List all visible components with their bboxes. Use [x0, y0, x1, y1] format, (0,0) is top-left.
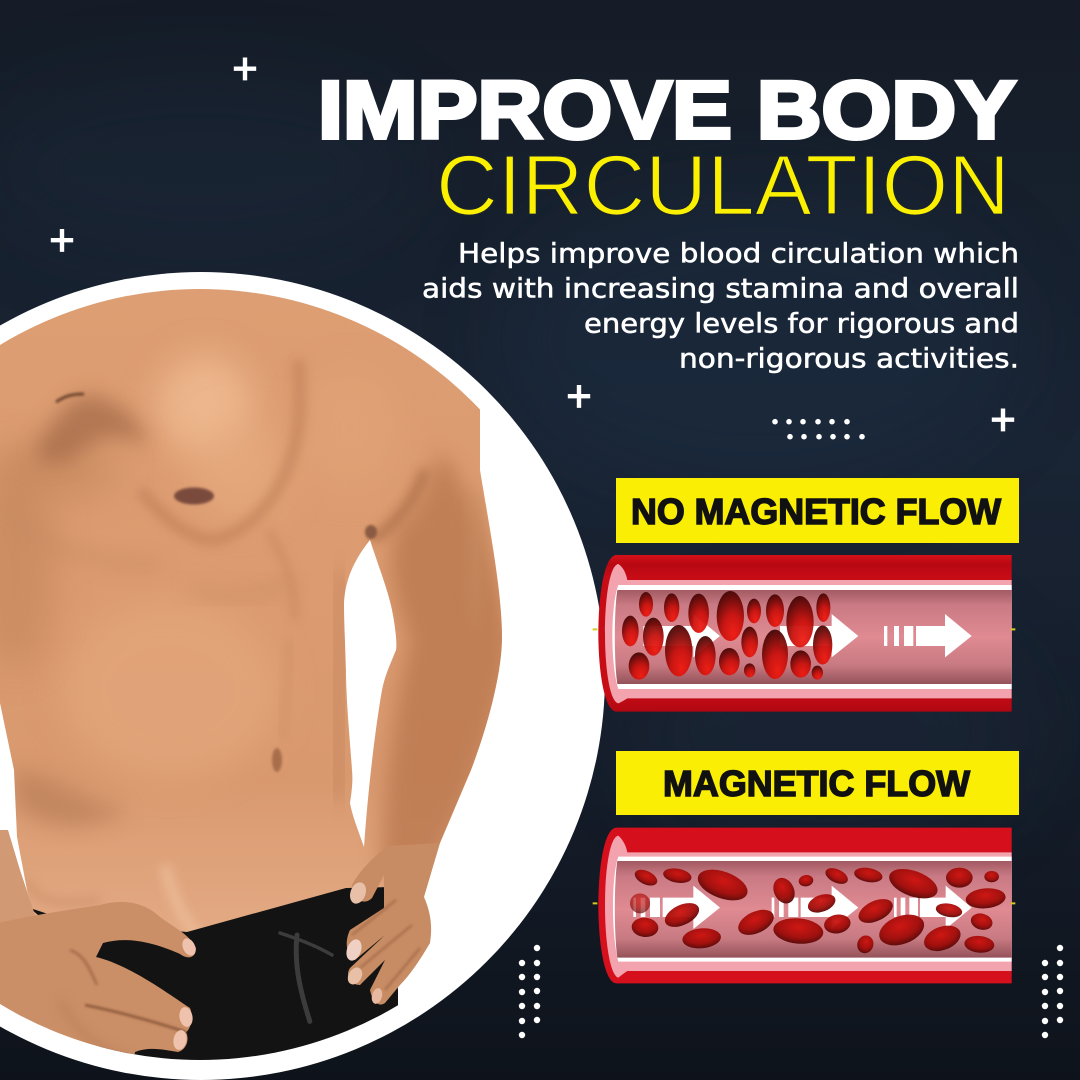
vessel lumen [612, 585, 1012, 689]
vessel wall [598, 555, 1012, 712]
title: Improve Body: IMPROVE BODY [318, 65, 1016, 156]
small yellow end markers [593, 628, 1015, 630]
decorative plus signs [51, 58, 1014, 431]
title: Circulation: CIRCULATION [436, 138, 1010, 234]
body text paragraph [422, 238, 1019, 374]
shorts [30, 887, 398, 1070]
soft muscle shading [0, 355, 510, 938]
red blood cells, spread out [630, 863, 1006, 956]
body text paragraph: energy levels for rigorous and [584, 308, 1019, 340]
left wrist [0, 830, 35, 923]
body text paragraph: aids with increasing stamina and overall [422, 274, 1019, 304]
vessel inner lining [605, 836, 1012, 978]
black sliver at left edge [0, 838, 6, 865]
dot pattern: bottom right [1042, 945, 1063, 1038]
body text paragraph: non-rigorous activities. [679, 344, 1019, 374]
navel [272, 748, 282, 772]
dot pattern: top right [772, 419, 865, 440]
gap between torso and arm [344, 540, 396, 847]
red blood cells, crowded [622, 591, 832, 680]
dot pattern: bottom centre [519, 945, 540, 1038]
nipple [174, 488, 214, 504]
flow arrows [633, 886, 972, 929]
vessel: no magnetic flow, clogged blood cells [593, 555, 1015, 712]
vessel wall [598, 828, 1012, 983]
left hand [0, 902, 196, 1054]
small yellow end markers [593, 902, 1015, 904]
label: magnetic flow: MAGNETIC FLOW [663, 763, 970, 804]
label: no magnetic flow: NO MAGNETIC FLOW [631, 491, 1001, 532]
right hand [344, 843, 440, 1005]
body text paragraph: Helps improve blood circulation which [458, 238, 1019, 270]
label: no magnetic flow [616, 478, 1019, 543]
side nipple [365, 525, 377, 539]
vessel inner lining [605, 564, 1012, 703]
flow arrows [643, 614, 972, 657]
torso and upper arm skin [0, 270, 502, 950]
shorts drawstring [280, 933, 332, 1022]
white circle behind the model [0, 272, 605, 1080]
label: magnetic flow [616, 751, 1019, 815]
model: male torso with hands on hips [0, 270, 510, 1070]
vessel lumen [613, 857, 1012, 962]
vessel: magnetic flow, free-flowing blood cells [593, 828, 1015, 983]
